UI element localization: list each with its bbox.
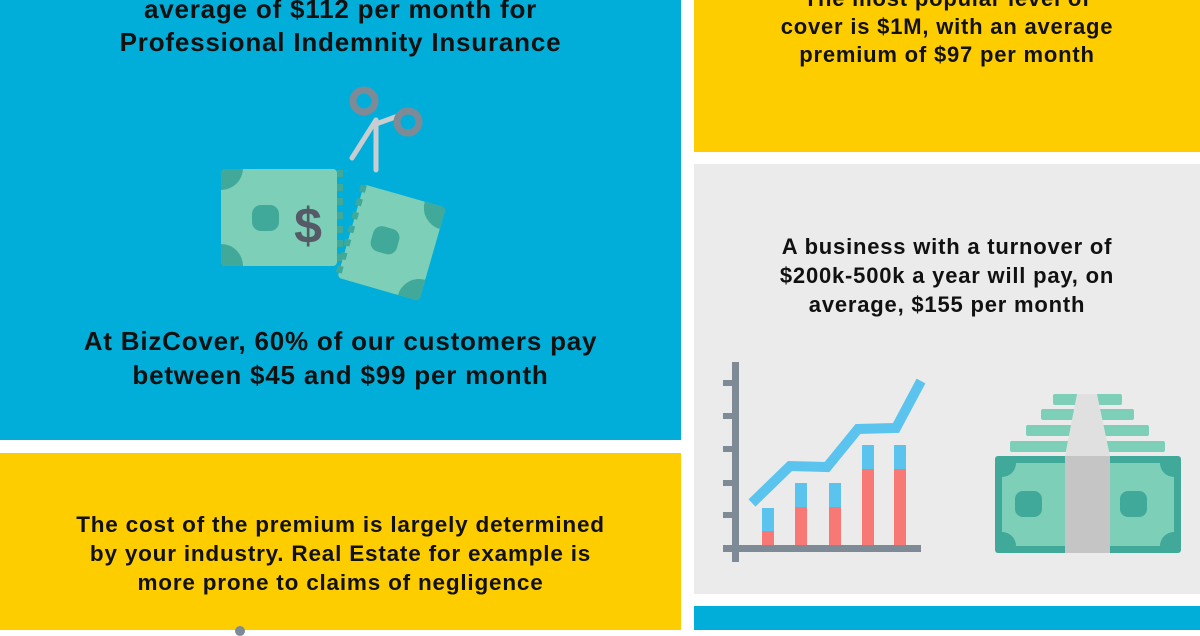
text: turnover — [780, 234, 1114, 317]
text: BizCover customers — [84, 326, 597, 390]
text: popular level of cover: cover is $1M, with an average — [781, 14, 1113, 39]
panel: popular cover — [694, 0, 1200, 152]
icon: scissors cutting dollar bill — [221, 86, 445, 300]
text: turnover: average, $155 per month — [809, 292, 1085, 317]
panel: average premium — [0, 0, 681, 440]
heading: average premium text — [120, 0, 561, 57]
text: industry determines cost — [76, 512, 605, 595]
text: industry determines cost: The cost of the premium is largely determined — [76, 512, 605, 537]
icon: scissors cutting dollar bill: $ — [294, 198, 322, 254]
icon: partial icon — [235, 626, 245, 636]
text: popular level of cover: premium of $97 per month — [799, 42, 1095, 67]
panel: industry — [0, 453, 681, 630]
panel: bottom right blue — [694, 606, 1200, 630]
panel: turnover — [694, 164, 1200, 594]
chart: growth bars — [723, 362, 926, 562]
text: BizCover customers: At BizCover, 60% of our customers pay — [84, 326, 597, 356]
text: industry determines cost: by your industry. Real Estate for example is — [90, 541, 591, 566]
text: turnover: A business with a turnover of — [782, 234, 1112, 259]
text: industry determines cost: more prone to claims of negligence — [137, 570, 544, 595]
text: BizCover customers: between $45 and $99 per month — [132, 360, 549, 390]
text: popular level of cover — [781, 0, 1113, 67]
text: turnover: $200k-500k a year will pay, on — [780, 263, 1114, 288]
icon: money stack — [995, 394, 1181, 553]
heading: average premium text: Professional Indemnity Insurance — [120, 27, 561, 57]
